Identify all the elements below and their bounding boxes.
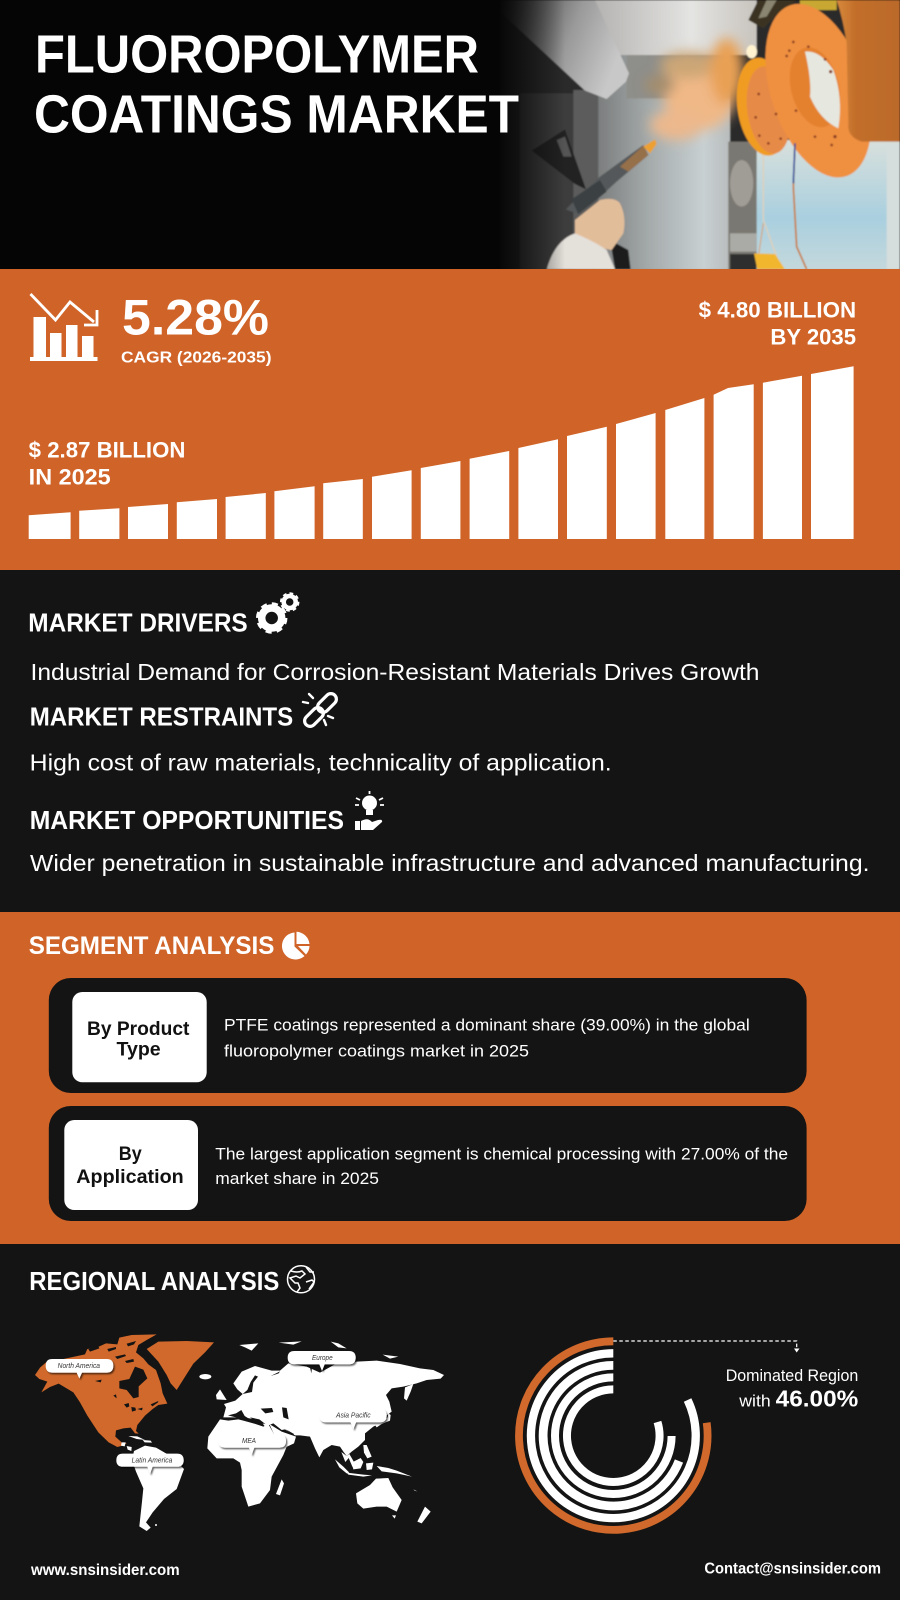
label box: by product type: By Product (87, 1018, 190, 1040)
label: north america: North America (58, 1363, 100, 1370)
callout: dominated region: Dominated Region (726, 1366, 858, 1385)
label: north america (46, 1359, 113, 1379)
text: product type: fluoropolymer coatings market in 2025 (224, 1042, 529, 1061)
2035 value (699, 298, 856, 350)
label: latin america: Latin America (132, 1458, 172, 1465)
label box: by product type (72, 992, 207, 1082)
header panel (0, 0, 900, 270)
radial chart: regional shares (519, 1341, 708, 1530)
icon: gears (258, 594, 298, 632)
heading: market restraints: MARKET RESTRAINTS (30, 702, 293, 732)
icon: bulb in hand (355, 791, 384, 830)
map: north america highlighted (35, 1334, 214, 1447)
callout arrow (613, 1341, 800, 1352)
label: asia pacific: Asia Pacific (335, 1413, 371, 1420)
bar chart: market growth (29, 366, 854, 539)
text: application: The largest application segment is chemical processing with 27.00% of the (215, 1144, 788, 1163)
text: restraints: High cost of raw materials, technicality of application. (30, 750, 612, 776)
CAGR value (121, 289, 272, 366)
map: europe, africa, asia and oceania (207, 1341, 444, 1523)
CAGR value: 5.28% (122, 289, 269, 345)
callout: dominated region: with (738, 1392, 771, 1411)
2025 value (29, 438, 185, 490)
heading: market opportunities: MARKET OPPORTUNITIES (30, 805, 344, 835)
callout: dominated region (726, 1366, 858, 1412)
photo: powder coating spray gun (500, 0, 900, 270)
text: product type: PTFE coatings represented a dominant share (39.00%) in the global (224, 1016, 750, 1035)
label: europe: Europe (312, 1355, 333, 1362)
heading: market drivers: MARKET DRIVERS (28, 608, 248, 638)
label box: by application: By (119, 1143, 142, 1165)
label: europe (288, 1351, 356, 1371)
panel: segment analysis (0, 912, 900, 1244)
callout: dominated region: 46.00% (776, 1386, 858, 1412)
heading: regional analysis: REGIONAL ANALYSIS (29, 1266, 279, 1296)
label: mea: MEA (242, 1438, 256, 1445)
icon: pie chart (282, 932, 310, 959)
title (34, 25, 519, 144)
icon: chart with trend arrow (30, 294, 98, 361)
title: COATINGS MARKET (34, 84, 519, 144)
label: mea (218, 1434, 286, 1455)
text: product type (224, 1016, 750, 1061)
label box: by application (64, 1120, 198, 1210)
label: latin america (116, 1454, 184, 1474)
label: asia pacific (319, 1409, 387, 1429)
world map (35, 1334, 444, 1531)
label box: by product type: Type (116, 1039, 161, 1061)
CAGR value: CAGR (2026-2035) (121, 349, 272, 366)
text: drivers: Industrial Demand for Corrosion-Resistant Materials Drives Growth (30, 659, 760, 685)
text: application (215, 1144, 788, 1188)
2035 value: BY 2035 (770, 325, 856, 350)
card: by product type (49, 978, 807, 1093)
footer: website: www.snsinsider.com (30, 1562, 180, 1579)
label box: by application: Application (76, 1166, 184, 1188)
icon: globe (288, 1266, 314, 1293)
title: FLUOROPOLYMER (35, 25, 479, 85)
2025 value: $ 2.87 BILLION (29, 438, 185, 463)
card: by application (49, 1106, 807, 1221)
2025 value: IN 2025 (29, 465, 111, 490)
panel: regional analysis (0, 1244, 900, 1600)
2035 value: $ 4.80 BILLION (699, 298, 856, 323)
text: application: market share in 2025 (215, 1169, 379, 1188)
map labels (46, 1351, 387, 1474)
panel: market dynamics (0, 570, 900, 912)
text: opportunities: Wider penetration in sustainable infrastructure and advanced manufacturing. (30, 850, 870, 876)
icon: broken chain (302, 691, 339, 729)
heading: segment analysis: SEGMENT ANALYSIS (29, 932, 274, 960)
panel: market growth (0, 269, 900, 570)
map: south america and caribbean (121, 1374, 211, 1531)
photo fade to black (495, 0, 565, 270)
footer: contact: Contact@snsinsider.com (704, 1560, 881, 1577)
